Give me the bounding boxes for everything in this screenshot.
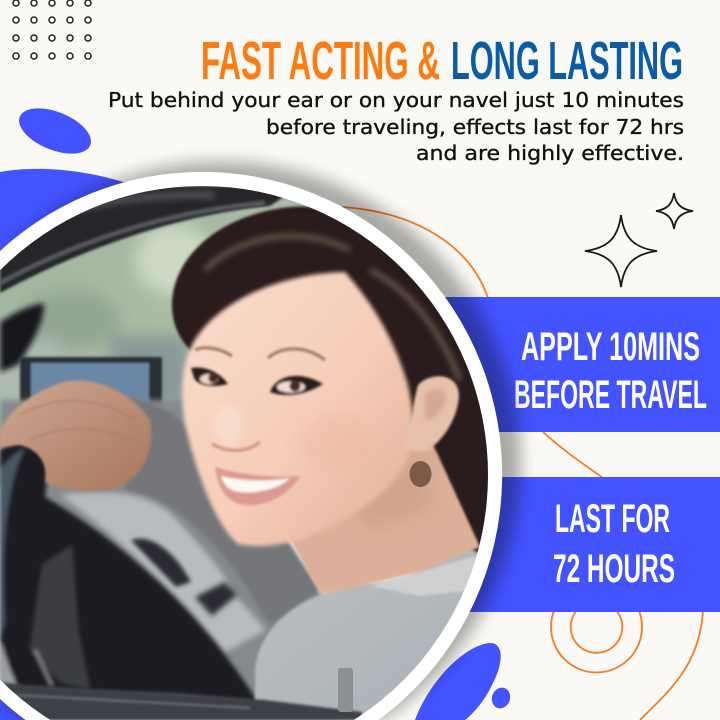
orange curved lines [342,207,703,720]
description text: before traveling, effects last for 72 hrs [266,115,684,139]
blue ellipse top left [13,99,97,163]
photo: woman smiling in car [0,186,492,720]
mouth [215,467,300,505]
face [182,272,413,546]
car interior [0,400,340,720]
navigation screen [20,357,162,407]
dashboard [60,492,266,652]
window frame [0,186,300,293]
door lock pin [338,668,353,712]
description text [108,88,684,165]
nose highlight [216,407,241,443]
blue blobs bottom [415,643,513,720]
seat belt [370,556,476,596]
hair [172,207,492,560]
banner: apply 10 mins [430,297,720,432]
photo ring shadow [4,162,521,720]
dash switch [195,582,237,616]
description text: and are highly effective. [416,141,684,165]
banner: last for 72 hours [430,477,720,612]
neck [290,444,480,594]
sleeve [125,398,320,625]
window background [0,186,490,486]
air vent [131,539,191,587]
title: FAST ACTING & [201,31,440,91]
star icons [585,193,693,287]
decorative dot grid [13,0,91,59]
hand [0,381,151,491]
large blue blob behind photo [0,169,135,720]
white photo ring [0,172,502,720]
description text: Put behind your ear or on your navel just 10 minutes [108,88,684,112]
patch behind ear [410,461,432,487]
sweater [255,540,490,720]
side mirror [0,304,44,372]
nose shadow [212,442,260,450]
steering wheel [0,442,258,702]
cheek blush [310,426,334,444]
door sill [0,683,362,720]
ear [400,376,459,451]
eyes [191,348,325,395]
